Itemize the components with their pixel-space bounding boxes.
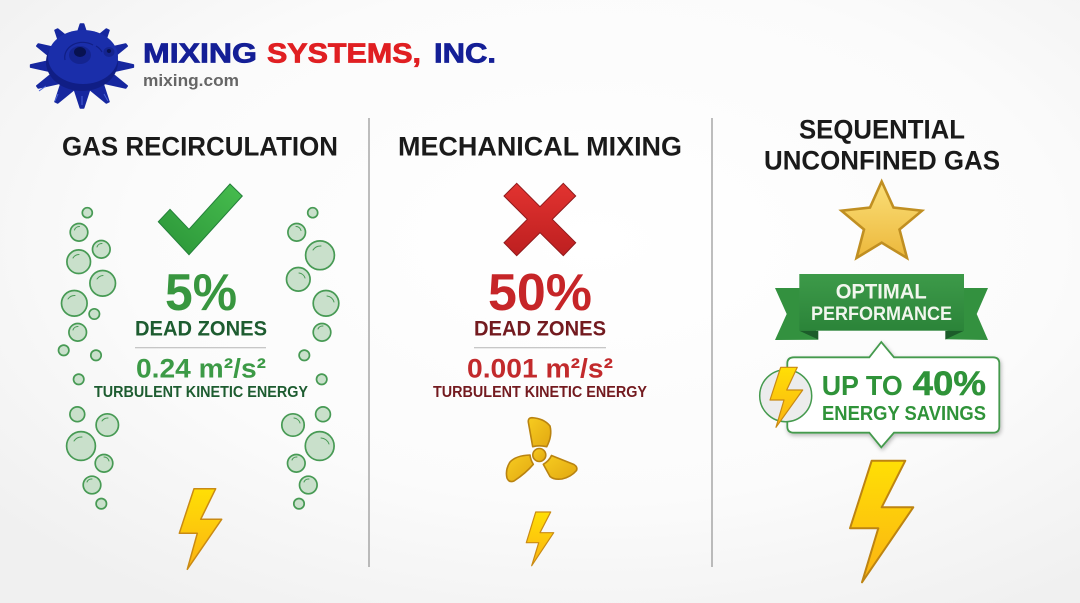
company name: SYSTEMS, [267,38,421,68]
icon: red cross [504,183,576,256]
panel: sequential unconfined gas [760,114,1000,582]
label: dead zones: DEAD ZONES [474,318,606,341]
logo: Mixing Systems [31,24,496,108]
label: dead zones: DEAD ZONES [135,318,267,341]
icon: circled bolt [760,367,812,427]
stat: 5 percent: 5% [165,264,237,322]
heading: GAS RECIRCULATION [62,132,338,162]
icon: lightning bolt [179,489,222,569]
website: mixing.com [143,71,239,90]
callout: up to 40 percent energy savings: 40% [913,365,986,403]
heading: MECHANICAL MIXING [398,132,682,162]
icon: propeller [506,418,577,482]
heading: SEQUENTIAL [799,114,965,144]
stat: 50 percent: 50% [488,264,592,322]
icon: green check mark [158,184,242,255]
company name: MIXING [143,38,257,68]
ribbon: optimal performance: OPTIMAL [836,281,927,304]
icon: blue gear [31,24,133,108]
company name: INC. [434,38,496,68]
label: turbulent kinetic energy: TURBULENT KINETIC ENERGY [94,384,309,401]
icon: gold star [842,182,922,258]
icon: lightning bolt [526,512,554,566]
stat: 0.001 m2/s2: 0.001 m²/s² [467,354,613,384]
icon: large lightning bolt [850,461,913,582]
callout: up to 40 percent energy savings: ENERGY SAVINGS [822,403,986,425]
stat: 0.24 m2/s2: 0.24 m²/s² [136,354,266,384]
panel: gas recirculation [58,132,339,569]
ribbon: optimal performance [775,274,988,340]
heading: UNCONFINED GAS [764,146,1000,176]
label: turbulent kinetic energy: TURBULENT KINETIC ENERGY [433,384,648,401]
ribbon: optimal performance: PERFORMANCE [811,304,952,325]
callout: up to 40 percent energy savings [760,342,999,447]
panel: mechanical mixing [398,132,682,566]
callout: up to 40 percent energy savings: UP TO [822,370,903,401]
bubbles left and right [58,208,339,509]
company name [143,38,496,68]
